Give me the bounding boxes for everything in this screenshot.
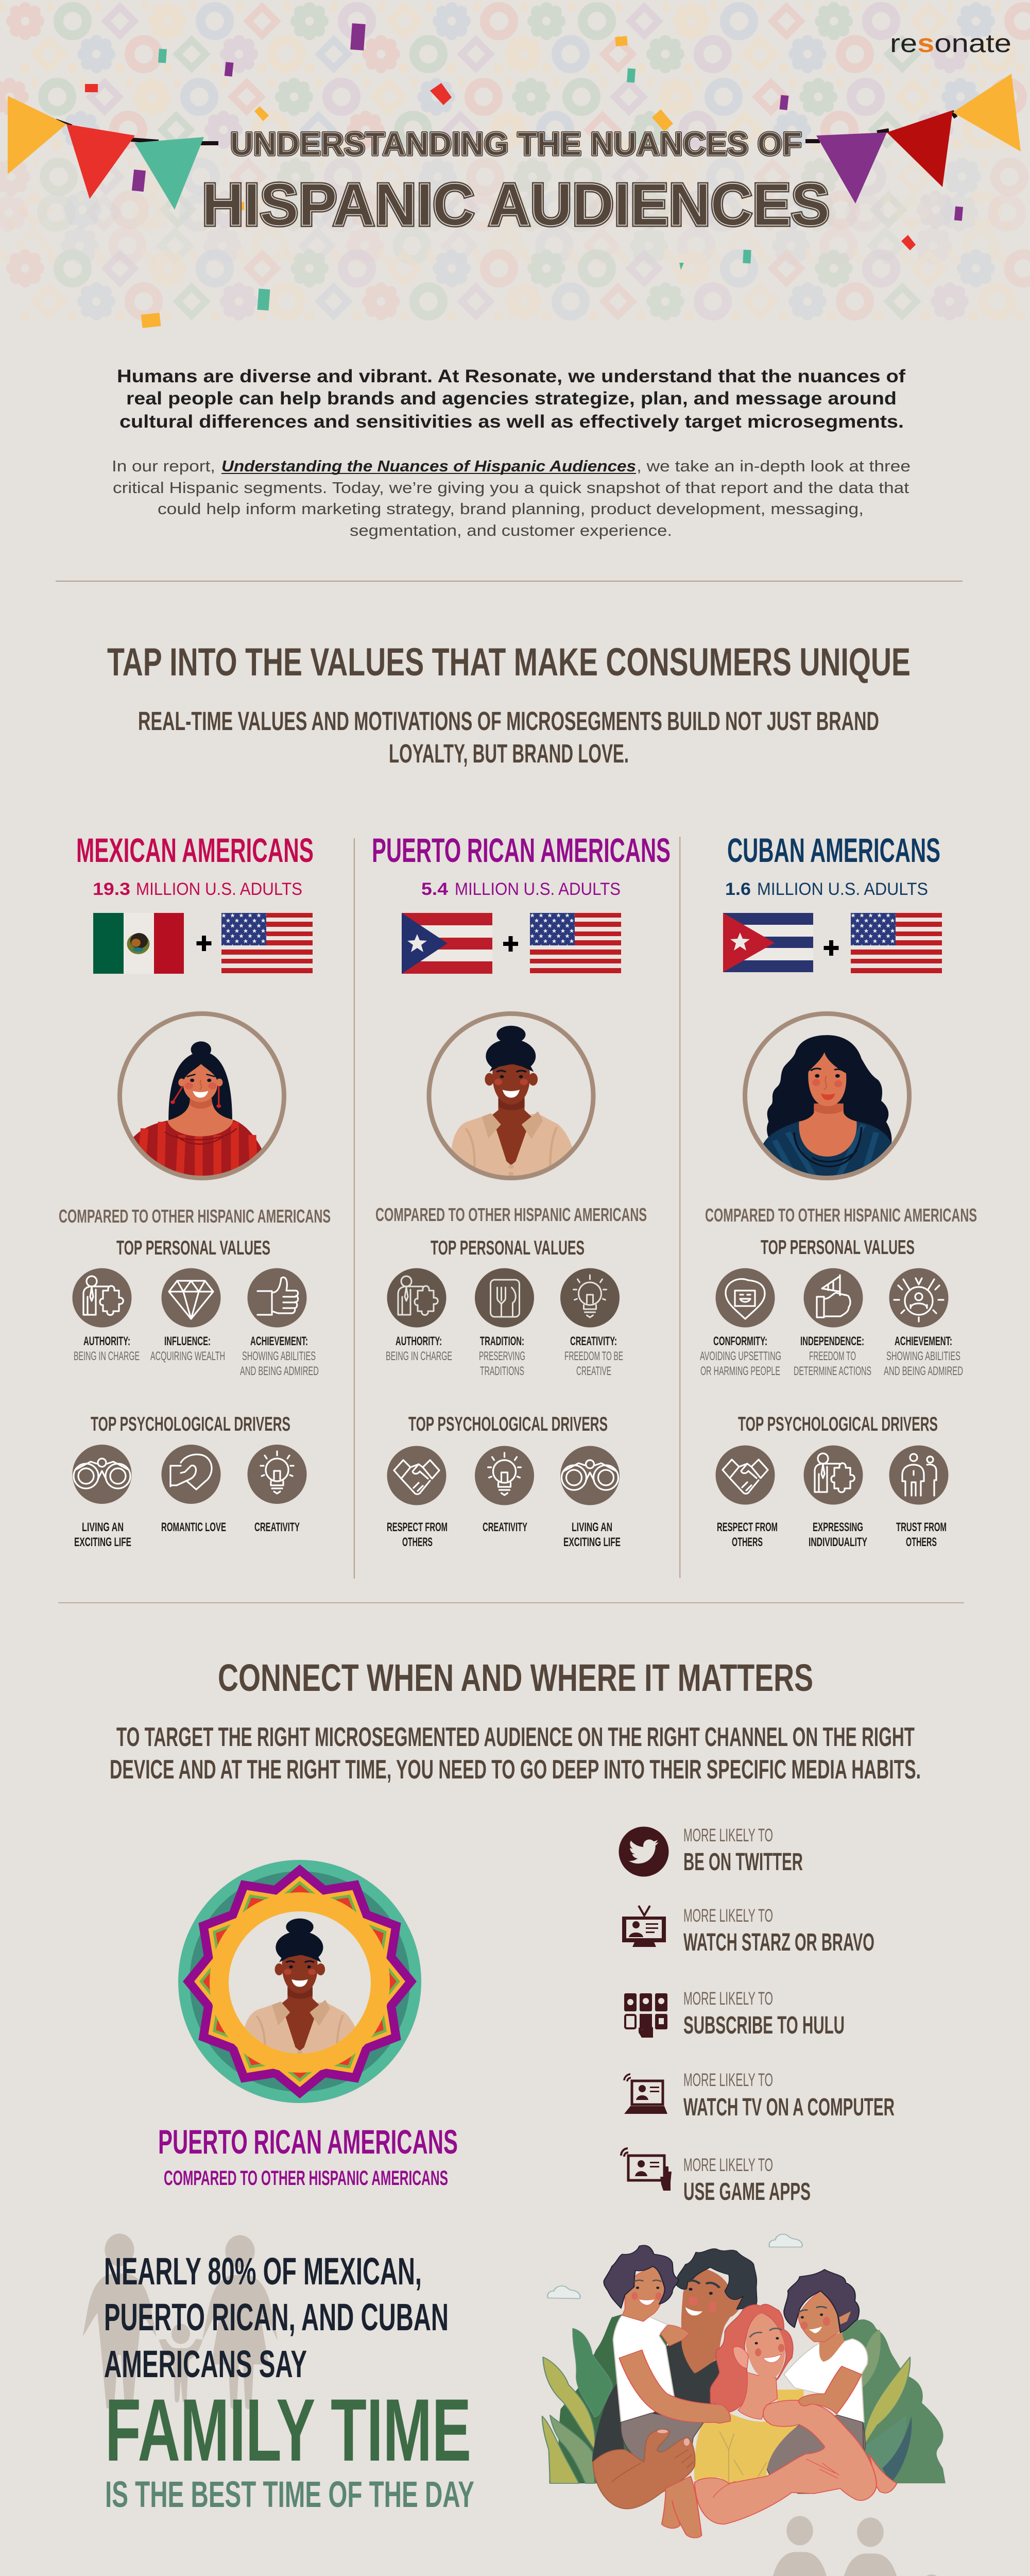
- value: authority: AUTHORITY:: [396, 1334, 442, 1348]
- family time statement: AMERICANS SAY: [104, 2343, 307, 2385]
- confetti: [85, 23, 963, 328]
- comparison label: COMPARED TO OTHER HISPANIC AMERICANS: [375, 1204, 647, 1225]
- driver: exciting life: EXCITING LIFE: [563, 1535, 621, 1549]
- media habit: twitter: MORE LIKELY TO: [683, 1825, 773, 1845]
- driver: respect: RESPECT FROM: [717, 1520, 778, 1534]
- value: independence: FREEDOM TO: [809, 1349, 856, 1363]
- icon: US flag: [530, 913, 621, 973]
- media habit: Starz or Bravo: MORE LIKELY TO: [683, 1906, 773, 1926]
- intro statement: cultural differences and sensitivities as well as effectively target microsegments.: [119, 412, 904, 432]
- media habit: Hulu: [624, 1989, 845, 2039]
- report paragraph: critical Hispanic segments. Today, we’re giving you a quick snapshot of that report and the data that: [113, 479, 909, 497]
- driver: exciting life: LIVING AN: [82, 1520, 124, 1534]
- value: tradition: TRADITION:: [480, 1334, 524, 1348]
- driver: creativity: CREATIVITY: [483, 1520, 527, 1534]
- mandala caption: COMPARED TO OTHER HISPANIC AMERICANS: [164, 2167, 448, 2190]
- driver: respect: [387, 1446, 448, 1549]
- media habit: game apps: USE GAME APPS: [683, 2178, 811, 2206]
- driver: individuality: EXPRESSING: [813, 1520, 863, 1534]
- value: conformity: CONFORMITY:: [713, 1334, 767, 1348]
- value: conformity: [700, 1268, 781, 1378]
- driver: respect: RESPECT FROM: [387, 1520, 448, 1534]
- segment title: PUERTO RICAN AMERICANS: [372, 831, 671, 869]
- bunting left: [8, 96, 218, 210]
- population: MILLION U.S. ADULTS: [136, 879, 302, 899]
- driver: respect: OTHERS: [732, 1535, 763, 1549]
- value: tradition: TRADITIONS: [480, 1364, 524, 1378]
- value: independence: DETERMINE ACTIONS: [794, 1364, 871, 1378]
- value: influence: INFLUENCE:: [164, 1334, 211, 1348]
- value: creativity: [560, 1268, 623, 1378]
- silhouette: family left: [83, 2233, 278, 2409]
- driver: individuality: [803, 1446, 867, 1549]
- title: [202, 126, 830, 238]
- portrait: Cuban American woman: [745, 1014, 909, 1193]
- icon: Mexican flag: [93, 913, 184, 974]
- heading: top personal values: TOP PERSONAL VALUES: [431, 1237, 585, 1259]
- heading: top personal values: TOP PERSONAL VALUES: [761, 1236, 915, 1259]
- intro statement: real people can help brands and agencies strategize, plan, and message around: [126, 388, 897, 409]
- driver: creativity: CREATIVITY: [254, 1520, 300, 1534]
- report paragraph: segmentation, and customer experience.: [350, 521, 672, 539]
- population: MILLION U.S. ADULTS: [455, 879, 621, 899]
- mandala caption: [158, 2123, 458, 2190]
- portrait: Mexican American woman: [117, 1011, 286, 1180]
- portrait: Puerto Rican American woman: [429, 1014, 593, 1193]
- driver: trust: [889, 1446, 949, 1549]
- media habit: twitter: BE ON TWITTER: [683, 1849, 803, 1876]
- value: creativity: CREATIVE: [576, 1364, 611, 1378]
- value: achievement: AND BEING ADMIRED: [884, 1364, 963, 1378]
- value: authority: BEING IN CHARGE: [74, 1349, 140, 1363]
- mandala portrait: [178, 1860, 421, 2103]
- media habit: twitter: [619, 1825, 803, 1876]
- intro statement: [117, 366, 905, 432]
- highlight: family time: FAMILY TIME: [105, 2381, 471, 2480]
- silhouette: family right: [714, 2516, 958, 2576]
- icon: Cuban flag: [723, 913, 813, 972]
- bunting right: [805, 74, 1021, 204]
- value: authority: BEING IN CHARGE: [386, 1349, 452, 1363]
- value: achievement: [240, 1268, 319, 1378]
- population: 5.4: [421, 879, 448, 899]
- heading: top psychological drivers: TOP PSYCHOLOGICAL DRIVERS: [408, 1413, 608, 1435]
- mandala caption: PUERTO RICAN AMERICANS: [158, 2123, 458, 2161]
- value: conformity: AVOIDING UPSETTING: [700, 1349, 781, 1363]
- heading: connect: CONNECT WHEN AND WHERE IT MATTERS: [218, 1656, 813, 1699]
- value: achievement: AND BEING ADMIRED: [240, 1364, 319, 1378]
- icon: US flag: [851, 913, 942, 973]
- driver: exciting life: [72, 1445, 132, 1549]
- media habit: game apps: [621, 2148, 811, 2206]
- family time statement: [104, 2250, 449, 2385]
- icon: Puerto Rican flag: [402, 913, 492, 974]
- title: UNDERSTANDING THE NUANCES OF: [230, 126, 802, 162]
- value: authority: [72, 1268, 140, 1363]
- subheading: connect: [110, 1722, 921, 1785]
- report paragraph: Understanding the Nuances of Hispanic Audiences: [221, 457, 636, 475]
- driver: creativity: [475, 1446, 534, 1534]
- subheading: values: [138, 706, 879, 768]
- value: achievement: [884, 1268, 963, 1378]
- logo: resonate: resonate: [890, 29, 1011, 58]
- driver: exciting life: LIVING AN: [572, 1520, 612, 1534]
- heading: top personal values: TOP PERSONAL VALUES: [116, 1237, 270, 1259]
- heading: top psychological drivers: TOP PSYCHOLOGICAL DRIVERS: [91, 1413, 290, 1435]
- driver: exciting life: EXCITING LIFE: [74, 1535, 131, 1549]
- subheading: values: LOYALTY, BUT BRAND LOVE.: [389, 739, 629, 768]
- value: independence: [794, 1268, 871, 1378]
- family time statement: NEARLY 80% OF MEXICAN,: [104, 2250, 422, 2293]
- media habit: Starz or Bravo: [622, 1906, 874, 1956]
- value: achievement: SHOWING ABILITIES: [886, 1349, 960, 1363]
- population: 19.3: [93, 879, 130, 899]
- media habit: Starz or Bravo: WATCH STARZ OR BRAVO: [683, 1929, 874, 1956]
- value: creativity: FREEDOM TO BE: [564, 1349, 623, 1363]
- media habit: game apps: MORE LIKELY TO: [683, 2155, 773, 2175]
- report paragraph: , we take an in-depth look at three: [637, 457, 911, 475]
- value: creativity: CREATIVITY:: [570, 1334, 617, 1348]
- panel: Cuban Americans: [700, 831, 977, 1549]
- segment title: MEXICAN AMERICANS: [76, 831, 314, 869]
- value: tradition: PRESERVING: [479, 1349, 525, 1363]
- driver: trust: TRUST FROM: [896, 1520, 947, 1534]
- value: achievement: ACHIEVEMENT:: [895, 1334, 952, 1348]
- panel: Mexican Americans: [59, 831, 331, 1549]
- driver: romantic love: ROMANTIC LOVE: [161, 1520, 226, 1534]
- media habit: computer TV: MORE LIKELY TO: [683, 2070, 773, 2090]
- comparison label: COMPARED TO OTHER HISPANIC AMERICANS: [59, 1206, 331, 1227]
- intro statement: Humans are diverse and vibrant. At Resonate, we understand that the nuances of: [117, 366, 905, 386]
- value: influence: ACQUIRING WEALTH: [150, 1349, 225, 1363]
- value: achievement: ACHIEVEMENT:: [250, 1334, 308, 1348]
- population: 1.6: [725, 879, 751, 899]
- family illustration: [542, 2234, 946, 2538]
- plus sign: [197, 936, 211, 951]
- media habit: computer TV: WATCH TV ON A COMPUTER: [683, 2094, 895, 2121]
- driver: romantic love: [161, 1445, 226, 1534]
- best time of the day: IS THE BEST TIME OF THE DAY: [105, 2475, 474, 2515]
- plus sign: [503, 936, 518, 952]
- family time statement: PUERTO RICAN, AND CUBAN: [104, 2296, 449, 2338]
- report paragraph: could help inform marketing strategy, brand planning, product development, messaging,: [158, 500, 864, 518]
- driver: exciting life: [560, 1446, 621, 1549]
- value: authority: [386, 1268, 452, 1363]
- media habit: computer TV: [624, 2070, 895, 2121]
- driver: trust: OTHERS: [906, 1535, 937, 1549]
- plus sign: [824, 940, 838, 956]
- driver: respect: [716, 1446, 778, 1549]
- report paragraph: [112, 457, 911, 539]
- report paragraph: In our report,: [112, 457, 215, 475]
- value: influence: [150, 1268, 225, 1363]
- panel: Puerto Rican Americans: [372, 831, 671, 1549]
- title: HISPANIC AUDIENCES: [202, 171, 830, 238]
- title: UNDERSTANDING THE NUANCES OF: [230, 126, 802, 162]
- driver: creativity: [247, 1445, 307, 1534]
- title: HISPANIC AUDIENCES: [202, 171, 830, 238]
- media habit: Hulu: SUBSCRIBE TO HULU: [683, 2012, 845, 2039]
- driver: individuality: INDIVIDUALITY: [809, 1535, 867, 1549]
- value: conformity: OR HARMING PEOPLE: [700, 1364, 780, 1378]
- icon: US flag: [221, 913, 313, 973]
- driver: respect: OTHERS: [402, 1535, 433, 1549]
- value: achievement: SHOWING ABILITIES: [242, 1349, 316, 1363]
- population: MILLION U.S. ADULTS: [757, 879, 928, 899]
- value: authority: AUTHORITY:: [83, 1334, 130, 1348]
- value: independence: INDEPENDENCE:: [800, 1334, 864, 1348]
- media habit: Hulu: MORE LIKELY TO: [683, 1989, 773, 2009]
- value: tradition: [475, 1268, 534, 1378]
- header pattern background: [0, 0, 1030, 323]
